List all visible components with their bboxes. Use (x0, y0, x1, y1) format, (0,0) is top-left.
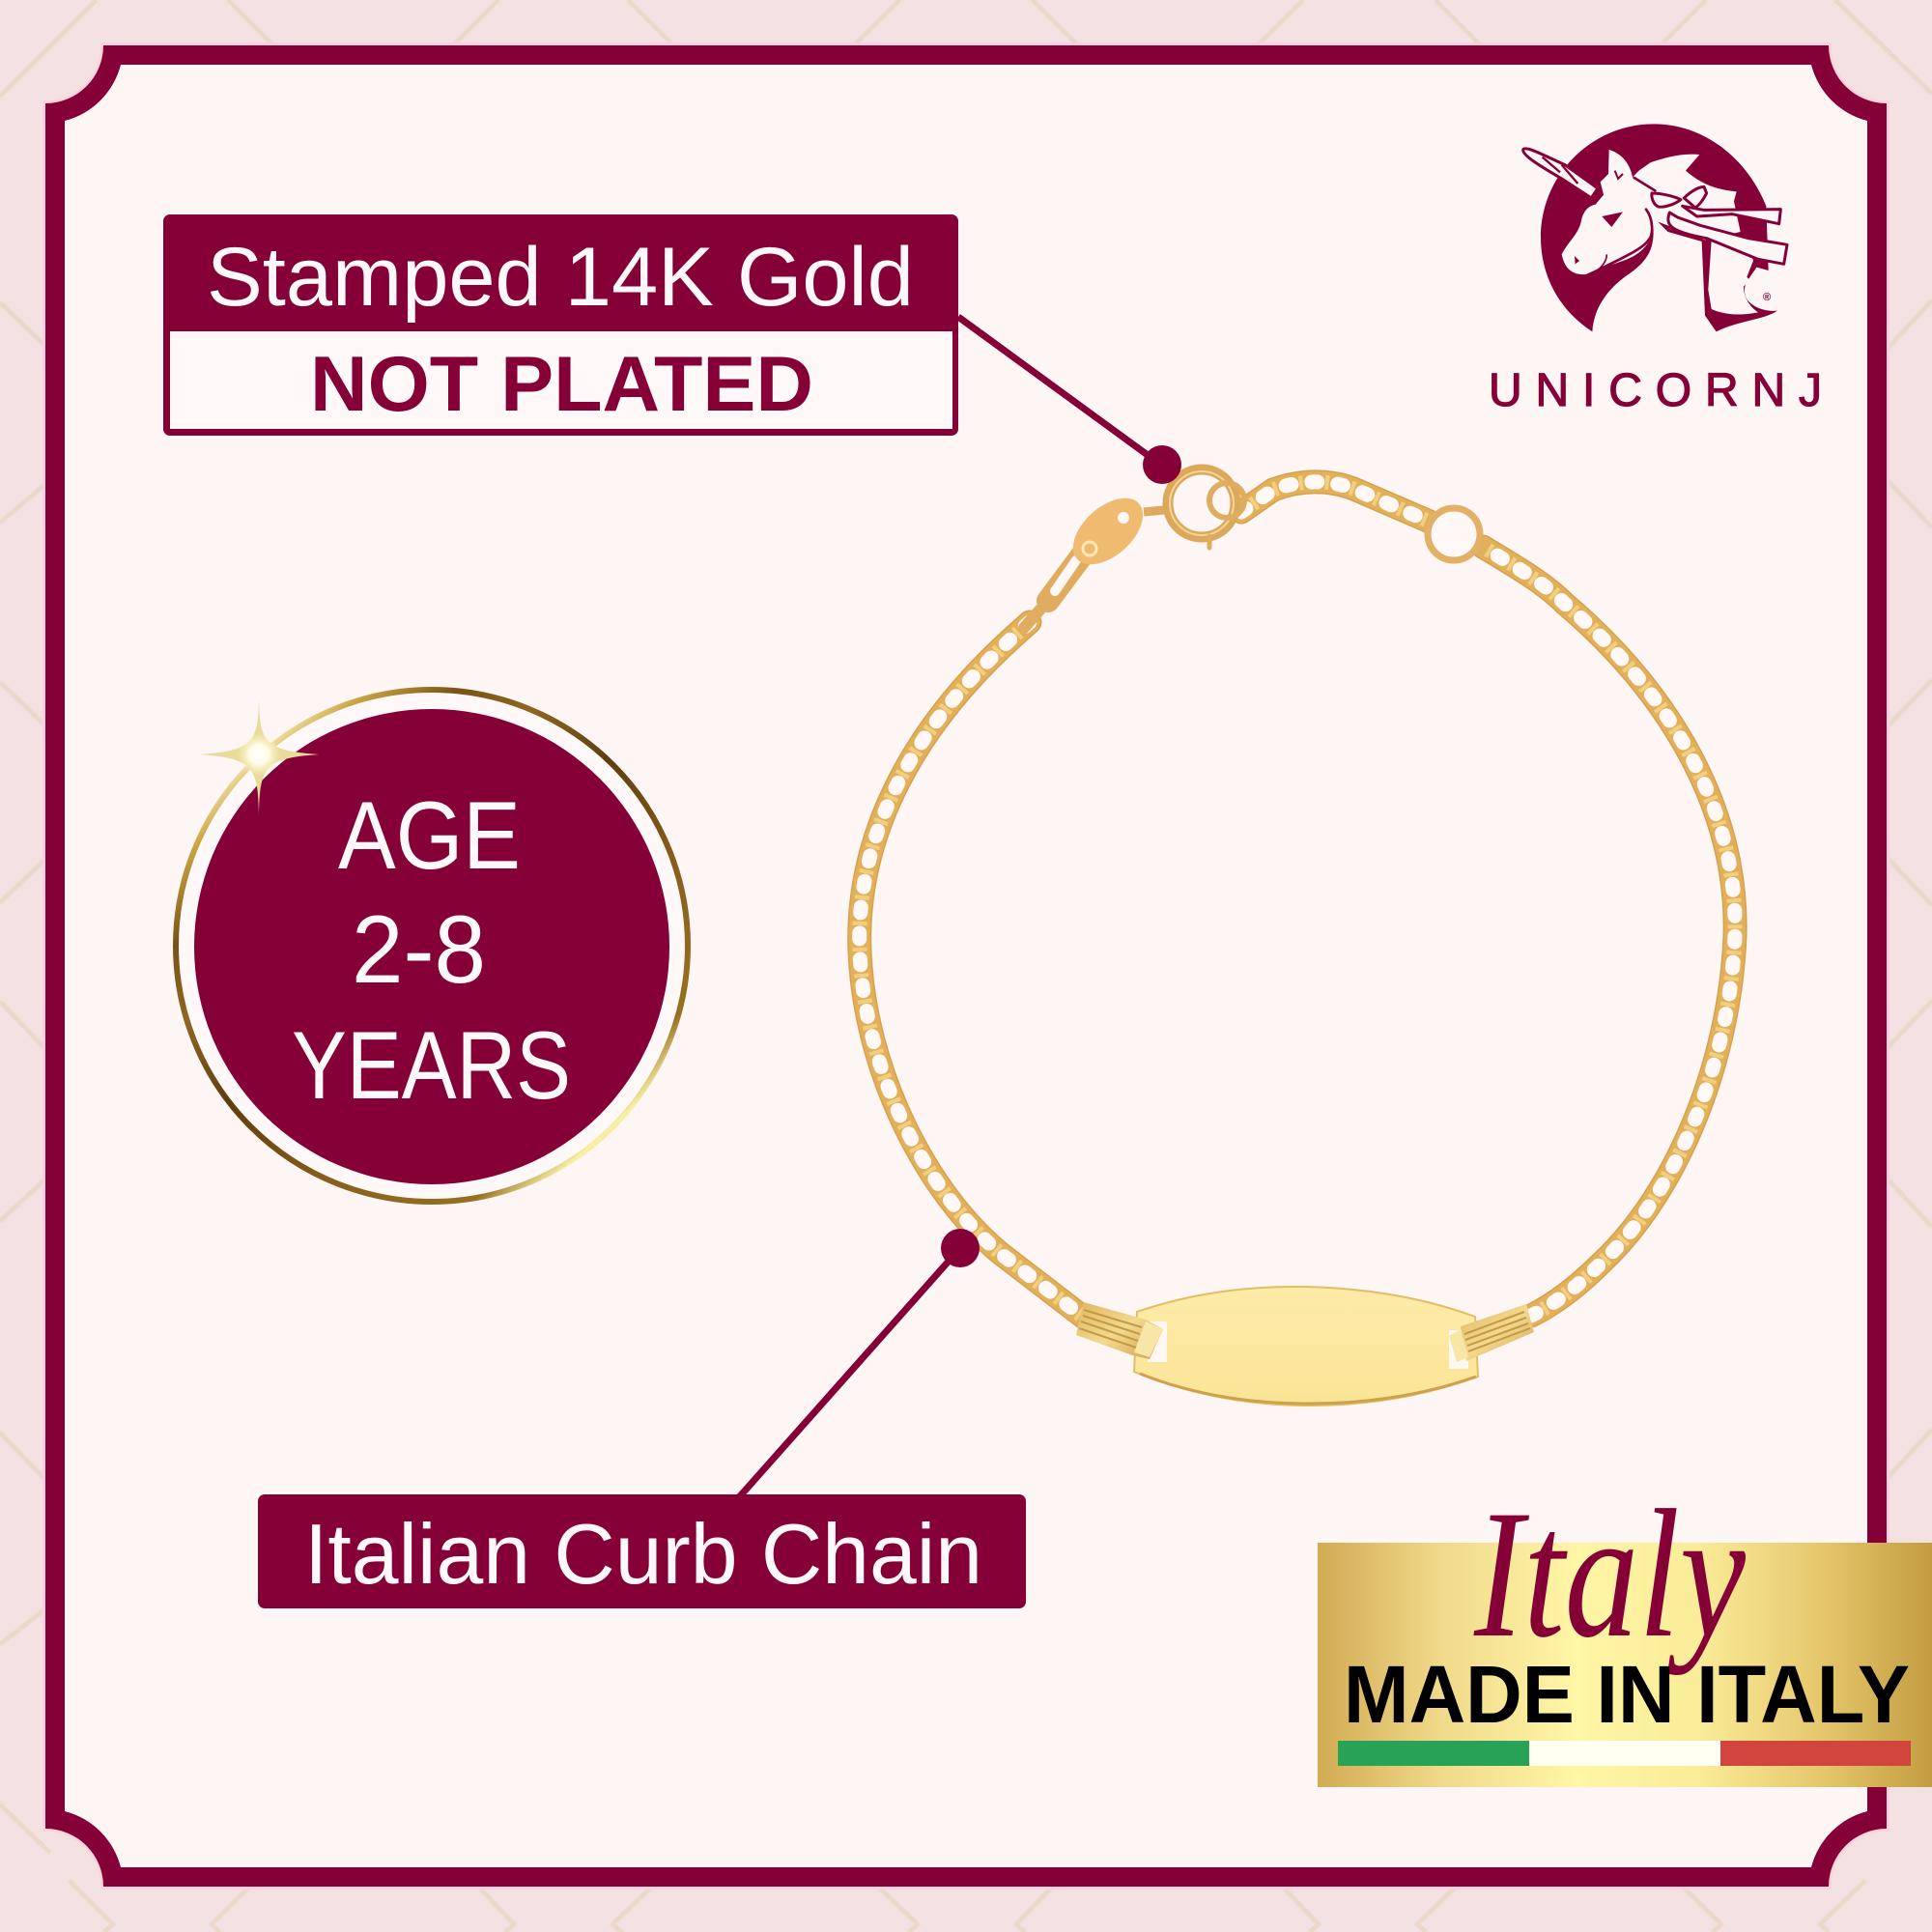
curb chain (860, 482, 1735, 1323)
logo: unicorn (1489, 124, 1822, 416)
age text: YEARS (292, 1011, 571, 1119)
label box: Stamped 14K Gold (207, 231, 914, 324)
script heading: Italy (1473, 1473, 1747, 1676)
icon: unicorn head: ® (1763, 292, 1772, 303)
callout: stamped 14K gold (163, 214, 1181, 484)
label box (163, 214, 958, 436)
callout: italian curb chain (258, 1229, 1026, 1608)
label box: NOT PLATED (310, 341, 813, 428)
badge text: MADE IN ITALY (1344, 1649, 1910, 1740)
icon: sparkle (199, 698, 319, 816)
age text: 2-8 (352, 895, 486, 1003)
age text: AGE (338, 781, 521, 889)
chain end tubes (1076, 1302, 1534, 1362)
age text (292, 781, 571, 1119)
lobster clasp (1024, 469, 1480, 628)
italian flag stripe (1338, 1741, 1911, 1766)
age badge (176, 690, 688, 1202)
icon: unicorn head (1523, 124, 1787, 331)
connector line and dot (958, 317, 1181, 484)
connector line and dot (739, 1229, 980, 1497)
logo wordmark: UNICORNJ (1489, 365, 1822, 416)
ID plate (1134, 1287, 1478, 1406)
label box: Italian Curb Chain (304, 1506, 982, 1602)
bracelet photo illustration (860, 469, 1735, 1406)
made in italy badge (1318, 1473, 1932, 1787)
